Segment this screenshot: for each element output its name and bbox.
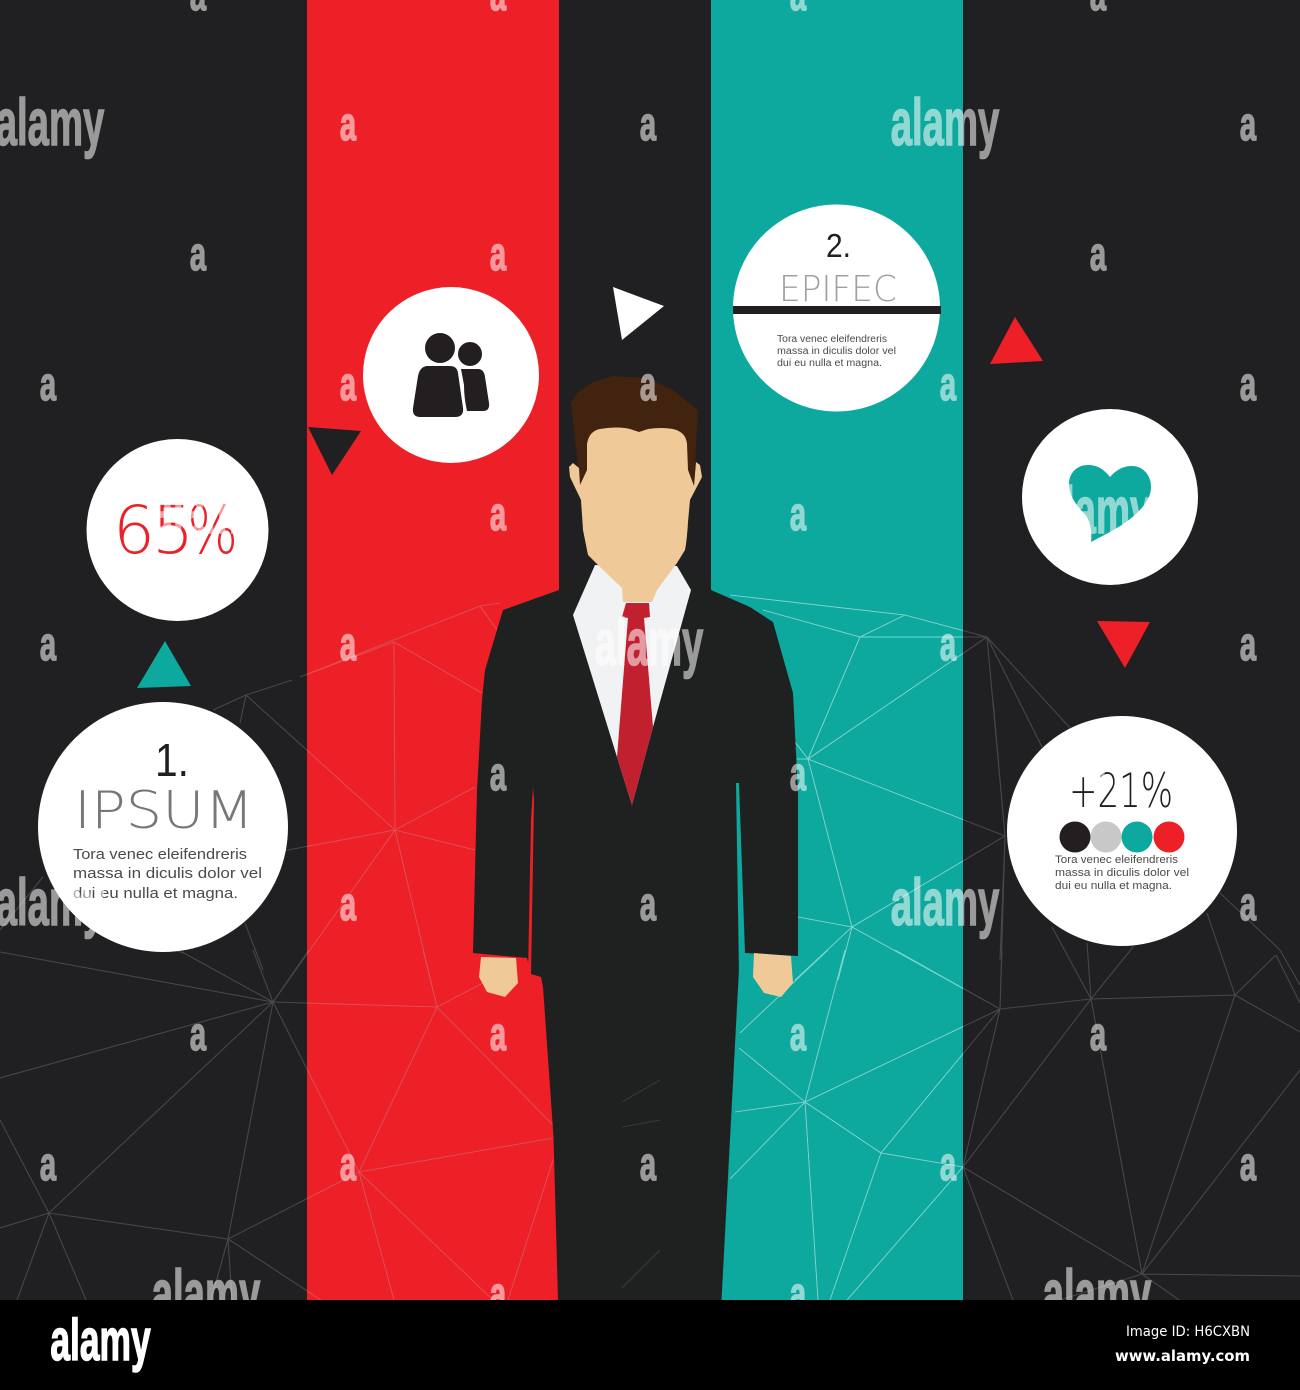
body text: Tora venec eleifendreris xyxy=(73,846,247,863)
heading IPSUM: IPSUM xyxy=(74,781,254,841)
body text: Tora venec eleifendreris xyxy=(777,334,887,345)
businessman figure xyxy=(473,376,798,1300)
watermark letters: a xyxy=(490,1269,506,1321)
watermark letters: a xyxy=(340,619,356,671)
body text: massa in diculis dolor vel xyxy=(73,865,262,882)
watermark letters: a xyxy=(1090,1009,1106,1061)
watermark letters: a xyxy=(1240,99,1256,151)
watermark letters: a xyxy=(790,489,806,541)
value +21%: +21% xyxy=(1069,764,1173,819)
body text: dui eu nulla et magna. xyxy=(73,885,238,902)
shirt xyxy=(573,565,691,805)
triangle: teal xyxy=(137,641,191,688)
watermark letters: a xyxy=(790,749,806,801)
watermark letters: a xyxy=(940,619,956,671)
watermark words xyxy=(0,86,1151,1331)
watermark letters: a xyxy=(640,359,656,411)
body text: massa in diculis dolor vel xyxy=(1055,867,1189,879)
image id: Image ID: H6CXBN xyxy=(1126,1324,1250,1340)
icon: heart xyxy=(1069,465,1151,542)
leg gap lines xyxy=(622,1080,660,1288)
footer logo: alamy xyxy=(50,1309,151,1373)
suit xyxy=(473,565,798,1300)
watermark letters: a xyxy=(490,489,506,541)
watermark letters: a xyxy=(340,879,356,931)
red column xyxy=(307,0,559,1300)
watermark words: alamy xyxy=(1043,474,1151,548)
watermark letters: a xyxy=(190,1009,206,1061)
watermark letters: a xyxy=(340,359,356,411)
watermark words: alamy xyxy=(152,1257,260,1331)
body text: massa in diculis dolor vel xyxy=(777,346,896,357)
watermark letters: a xyxy=(490,1009,506,1061)
icon: two people xyxy=(413,333,489,417)
face and neck xyxy=(569,428,702,602)
circle: people icon xyxy=(363,287,539,463)
watermark letters: a xyxy=(640,1139,656,1191)
triangle: red down xyxy=(1097,621,1150,668)
circle: step 1 IPSUM xyxy=(38,702,288,952)
footer bar xyxy=(0,1300,1300,1390)
body text: dui eu nulla et magna. xyxy=(1055,880,1172,892)
watermark letters: a xyxy=(1090,749,1106,801)
body text: Tora venec eleifendreris xyxy=(1055,854,1179,866)
watermark words: alamy xyxy=(595,606,703,680)
circle: step 2 EPIFEC xyxy=(733,204,941,412)
tie xyxy=(617,603,653,805)
watermark letters: a xyxy=(190,229,206,281)
circle: heart icon xyxy=(1022,409,1198,585)
watermark words: alamy xyxy=(891,86,999,160)
left hand xyxy=(479,957,518,997)
watermark letters: a xyxy=(1090,229,1106,281)
hair xyxy=(571,376,698,486)
body text xyxy=(1055,854,1189,892)
watermark words: alamy xyxy=(152,474,260,548)
watermark letters: a xyxy=(1240,619,1256,671)
number 1.: 1. xyxy=(155,734,189,786)
network mesh background xyxy=(0,595,1300,1300)
right hand xyxy=(753,953,793,997)
sleeve gap right xyxy=(736,783,745,975)
watermark letters: a xyxy=(340,1139,356,1191)
colour dots xyxy=(1060,822,1184,852)
watermark letters: a xyxy=(1240,879,1256,931)
watermark letters: a xyxy=(40,359,56,411)
number 2.: 2. xyxy=(826,227,851,264)
triangle: white xyxy=(613,287,664,340)
value 65%: 65 xyxy=(113,492,194,569)
website: www.alamy.com xyxy=(1115,1347,1250,1365)
body text xyxy=(73,846,262,902)
value 65%: % xyxy=(187,492,238,569)
divider bar xyxy=(733,306,941,314)
watermark letters: a xyxy=(940,1139,956,1191)
triangle: red up xyxy=(990,317,1043,364)
watermark letters: a xyxy=(640,99,656,151)
watermark letters: a xyxy=(340,99,356,151)
watermark letters: a xyxy=(1240,359,1256,411)
watermark letters: a xyxy=(940,359,956,411)
watermark letters: a xyxy=(790,1269,806,1321)
circle: plus 21 percent xyxy=(1007,716,1237,946)
teal column xyxy=(711,0,963,1300)
watermark letters: a xyxy=(190,749,206,801)
triangle: black xyxy=(308,427,361,475)
body text xyxy=(777,334,896,369)
heading EPIFEC: EPIFEC xyxy=(779,269,897,310)
watermark letters: a xyxy=(40,619,56,671)
watermark letters: a xyxy=(790,1009,806,1061)
watermark letters: a xyxy=(490,229,506,281)
watermark letters: a xyxy=(1240,1139,1256,1191)
sleeve gap left xyxy=(528,787,534,975)
watermark letters: a xyxy=(40,1139,56,1191)
watermark letters: a xyxy=(490,749,506,801)
watermark words: alamy xyxy=(891,866,999,940)
watermark letters: a xyxy=(790,229,806,281)
watermark letters: a xyxy=(640,879,656,931)
watermark words: alamy xyxy=(1043,1257,1151,1331)
body text: dui eu nulla et magna. xyxy=(777,358,882,369)
circle: 65 percent xyxy=(86,439,268,621)
